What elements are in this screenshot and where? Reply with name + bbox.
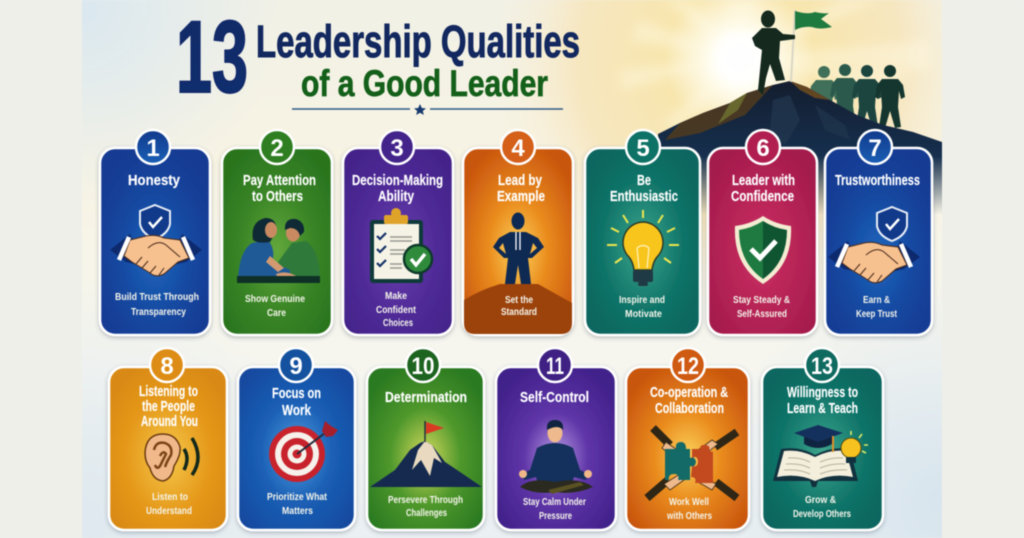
number badge 7: 7 [868,135,882,162]
card 9: Focus on Work [238,348,355,530]
number badge 6 [746,130,780,164]
card background [238,367,355,530]
heading: Trustworthiness [835,173,920,189]
leader silhouette with flag [752,10,832,95]
card background [626,367,749,530]
number badge 5 [626,130,660,164]
card background [222,148,332,335]
heading [352,173,443,205]
heading: Enthusiastic [610,189,678,205]
heading: Co-operation & [650,385,728,401]
subtitle: Prioritize What [267,491,327,503]
subtitle [245,293,305,319]
number badge 5: 5 [636,135,650,162]
subtitle: with Others [666,510,712,522]
subtitle: Challenges [406,507,447,519]
card 4: Lead by Example [463,130,573,335]
heading: Be [637,173,651,189]
card background [343,148,453,335]
card 13: Willingness to Learn & Teach [762,348,883,530]
number badge 10: 10 [412,353,434,380]
heading: Around You [141,414,198,430]
number badge 3 [380,130,414,164]
heading [139,384,198,430]
leader figure [752,10,795,95]
card background [100,148,210,335]
number badge 8: 8 [160,353,174,380]
big number 13: 13 [176,0,248,114]
heading: the People [142,399,195,415]
heading: Collaboration [655,401,724,417]
icon: target with arrow [269,421,338,482]
number badge 9 [279,348,313,382]
subtitle [619,294,665,320]
heading: Leader with [732,173,795,189]
card 2: Pay Attention to Others [222,130,332,335]
number badge 10 [406,348,440,382]
heading: Ability [378,189,414,205]
icon: hands holding puzzle pieces [647,428,737,498]
subtitle [267,491,327,517]
number badge 1: 1 [146,135,160,162]
card 6: Leader with Confidence [708,130,817,335]
subtitle: Inspire and [619,294,665,306]
subtitle: Listen to [152,491,188,503]
number badge 12: 12 [677,353,699,380]
group of four followers silhouettes [809,64,905,129]
heading [787,385,858,417]
sun glow [714,32,766,84]
icon: clipboard checklist [370,208,432,283]
title line 2: of a Good Leader [301,63,548,104]
number badge 12 [671,348,705,382]
card background [109,367,227,530]
subtitle: Matters [282,505,313,517]
card 11: Self-Control [496,348,616,530]
number badge 4: 4 [511,135,525,162]
heading: to Others [252,189,303,205]
heading: Confidence [731,189,794,205]
subtitle: Keep Trust [856,308,897,320]
number badge 4 [501,130,535,164]
subtitle: Choices [383,317,413,329]
card 10: Determination [367,348,484,530]
heading: Lead by [498,173,542,189]
subtitle: Confident [376,304,416,316]
subtitle: Pressure [539,510,572,522]
subtitle: Transparency [131,306,186,318]
subtitle: Self-Assured [737,308,787,320]
subtitle: Understand [146,505,192,517]
subtitle: Persevere Through [388,494,463,506]
subtitle: Build Trust Through [115,291,199,303]
heading [272,386,321,419]
heading: Learn & Teach [787,401,858,417]
subtitle: Develop Others [793,508,851,520]
icon: green shield with check [735,216,791,284]
subtitle: Standard [501,306,537,318]
heading [243,173,316,205]
heading: Focus on [272,386,321,402]
number badge 3: 3 [390,135,404,162]
heading: Determination [385,390,467,406]
heading: Listening to [139,384,198,400]
heading: Honesty [128,173,180,189]
card 5: Be Enthusiastic [585,130,700,335]
subtitle: Earn & [863,294,890,306]
subtitle [388,494,463,519]
heading [650,385,728,417]
icon: light bulb [607,210,679,286]
number badge 11: 11 [546,353,564,380]
subtitle: Make [385,290,407,302]
icon: meditating person [519,420,593,494]
number badge 13 [805,348,839,382]
title line 1: Leadership Qualities [256,16,580,67]
icon: mountain with red flag [370,421,482,487]
number badge 7 [858,130,892,164]
subtitle: Stay Calm Under [523,496,586,508]
card background [367,367,484,530]
title [176,0,580,115]
icon: ear with sound waves [145,434,198,481]
subtitle [115,291,199,318]
subtitle [501,294,537,318]
heading: Willingness to [787,385,858,401]
heading: Self-Control [520,390,589,406]
number badge 1 [136,130,170,164]
card 7: Trustworthiness [825,130,932,335]
subtitle: Motivate [625,308,662,320]
subtitle [733,294,790,320]
heading: Decision-Making [352,173,443,189]
heading [731,173,795,205]
divider with star [292,104,563,115]
card background [762,367,883,530]
subtitle [523,496,586,522]
subtitle [856,294,897,320]
heading: Work [282,403,312,419]
subtitle: Work Well [669,496,709,508]
card background [463,148,573,335]
heading [610,173,678,205]
mountain [658,81,942,215]
subtitle: Set the [505,294,533,306]
subtitle [666,496,712,522]
number badge 13: 13 [811,353,833,380]
icon: shield and handshake [828,207,920,283]
heading: Example [497,189,545,205]
card background [496,367,616,530]
card 3: Decision-Making Ability [343,130,453,335]
icon: two people talking [237,218,320,283]
heading [497,173,545,205]
card background [825,148,932,335]
subtitle: Stay Steady & [733,294,790,306]
icon: shield and handshake [110,205,202,276]
number badge 6: 6 [756,135,770,162]
card background [585,148,700,335]
subtitle: Grow & [805,494,836,506]
heading: Pay Attention [243,173,316,189]
icon: green flag [795,11,832,30]
number badge 2 [260,130,294,164]
number badge 9: 9 [289,353,303,380]
number badge 11 [538,348,572,382]
icon: leader silhouette on mound [464,212,572,334]
icon: flag pole [791,10,795,82]
card 12: Co-operation & Collaboration [626,348,749,530]
subtitle: Show Genuine [245,293,305,305]
card 1: Honesty [100,130,210,335]
icon: book, graduation cap and bulb [773,425,868,487]
number badge 8 [150,348,184,382]
subtitle [376,290,416,329]
subtitle: Care [267,307,286,319]
subtitle [793,494,851,520]
card background [708,148,817,335]
subtitle [146,491,192,517]
card 8: Listening to the People Around You [109,348,227,530]
sun rays [620,0,930,128]
number badge 2: 2 [270,135,284,162]
